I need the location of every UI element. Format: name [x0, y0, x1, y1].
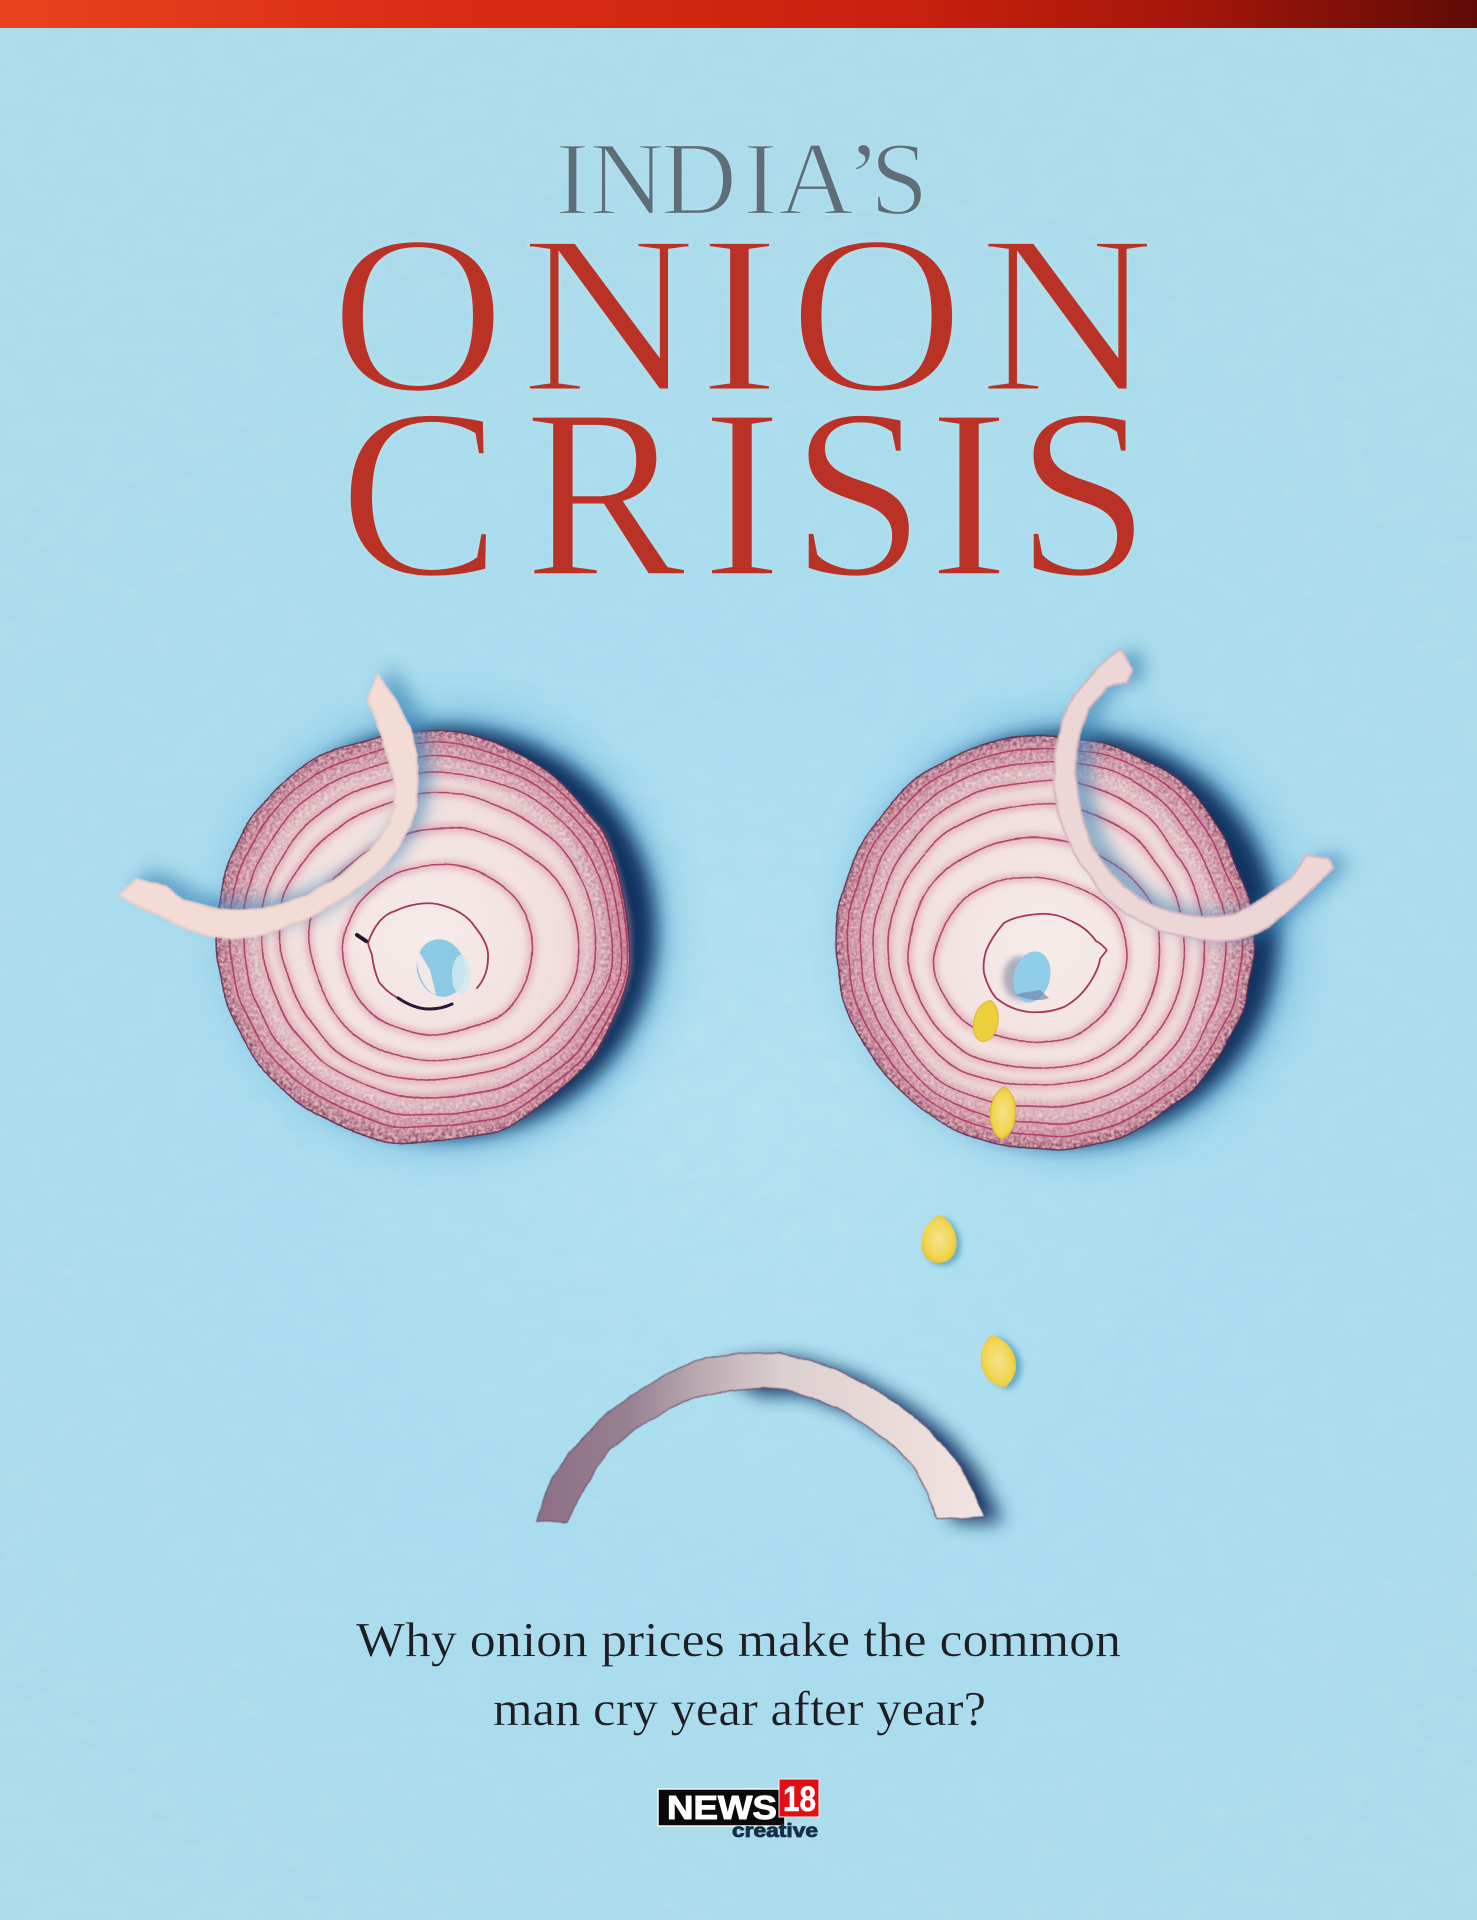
mouth: frowning onion strip	[537, 1353, 1003, 1522]
left onion disc with rings	[215, 730, 630, 1142]
left onion centre spiral	[357, 903, 488, 1009]
subtitle	[356, 1612, 1121, 1736]
News18 creative logo	[658, 1779, 819, 1842]
top red gradient bar	[0, 0, 1477, 28]
tears: yellow seeds	[919, 998, 1027, 1394]
title	[330, 120, 1155, 628]
logo wordmark: NEWS	[667, 1789, 777, 1826]
title line: Onion: ONION	[330, 189, 1155, 440]
right onion hole	[1003, 947, 1056, 1007]
logo tagline: creative	[732, 1821, 818, 1842]
right eyebrow: onion strip	[1054, 648, 1348, 941]
left onion hole	[411, 934, 471, 1002]
title line: India's: INDIA’S	[555, 120, 928, 237]
mouth shadow	[718, 1358, 1003, 1522]
right onion shadow	[856, 724, 1288, 1148]
seed tear 4	[975, 1329, 1027, 1394]
logo number: 18	[783, 1780, 816, 1819]
right eye: onion slice	[835, 648, 1348, 1150]
subtitle line 1: Why onion prices make the common	[356, 1612, 1121, 1667]
right onion centre spiral	[984, 914, 1107, 1012]
left eye: onion slice	[119, 666, 662, 1142]
seed tear 3	[919, 1213, 963, 1267]
title line: Crisis: CRISIS	[339, 358, 1151, 628]
right onion disc with rings	[835, 736, 1254, 1150]
left onion shadow	[234, 718, 662, 1142]
seed tear 2	[989, 1086, 1017, 1140]
mouth strip shape	[537, 1353, 985, 1522]
seed tear 1	[970, 998, 1002, 1044]
subtitle line 2: man cry year after year?	[493, 1681, 986, 1736]
left eyebrow: onion strip	[119, 666, 431, 938]
